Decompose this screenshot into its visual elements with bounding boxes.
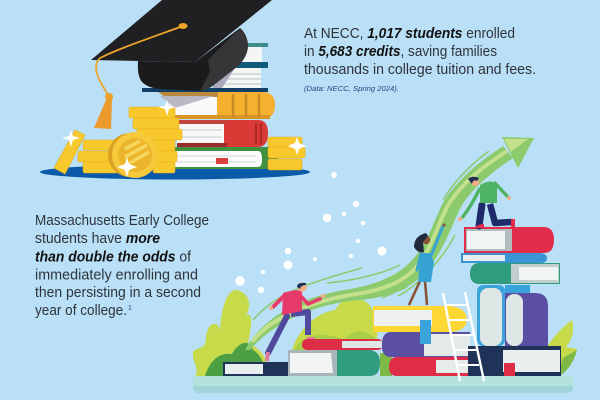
red book: [177, 120, 268, 147]
text: Early College odds: Massachusetts Early College: [35, 213, 209, 229]
bubbles: [235, 172, 386, 293]
text: Early College odds: students have more: [35, 231, 160, 247]
growth arrow: [245, 137, 534, 350]
text: NECC enrollment: At NECC, 1,017 students enrolled: [304, 26, 515, 42]
middle book stack: [373, 306, 473, 376]
left book stack: [223, 339, 383, 376]
text: NECC enrollment: [304, 26, 536, 93]
green book: [470, 263, 560, 284]
sparkles: [62, 100, 306, 177]
platform: [193, 376, 573, 393]
text: NECC enrollment: in 5,683 credits, saving families: [304, 44, 497, 60]
ladder: [443, 292, 484, 381]
person: man reaching down: [458, 177, 515, 228]
plants: [193, 290, 577, 376]
text: Early College odds: than double the odds of: [35, 250, 192, 266]
text: Early College odds: year of college.: [35, 303, 127, 319]
text: Early College odds: 1: [128, 305, 132, 312]
coin stacks: [54, 107, 305, 178]
blue book: [461, 253, 547, 263]
person: woman reaching: [409, 224, 446, 305]
text: Early College odds: [35, 213, 209, 319]
upright books: [477, 285, 505, 346]
tassel: [96, 26, 183, 97]
illustration: students climbing books: [193, 137, 577, 393]
right book stack: [461, 227, 561, 376]
green book: [175, 147, 278, 169]
big coin: [108, 133, 152, 177]
person: runner: [267, 282, 325, 361]
navy book: [468, 346, 561, 376]
illustration: graduation cap, books and coins: [40, 0, 310, 180]
text: NECC enrollment: (Data: NECC, Spring 2024).: [304, 86, 399, 93]
base ellipse: [40, 164, 310, 180]
graduation cap: [91, 0, 272, 129]
yellow book: [158, 92, 275, 119]
upper book stack: [142, 43, 268, 92]
text: Early College odds: immediately enrolling and: [35, 268, 198, 284]
text: Early College odds: then persisting in a second: [35, 285, 201, 301]
red book: [464, 227, 554, 253]
text: NECC enrollment: thousands in college tuition and fees.: [304, 62, 536, 78]
